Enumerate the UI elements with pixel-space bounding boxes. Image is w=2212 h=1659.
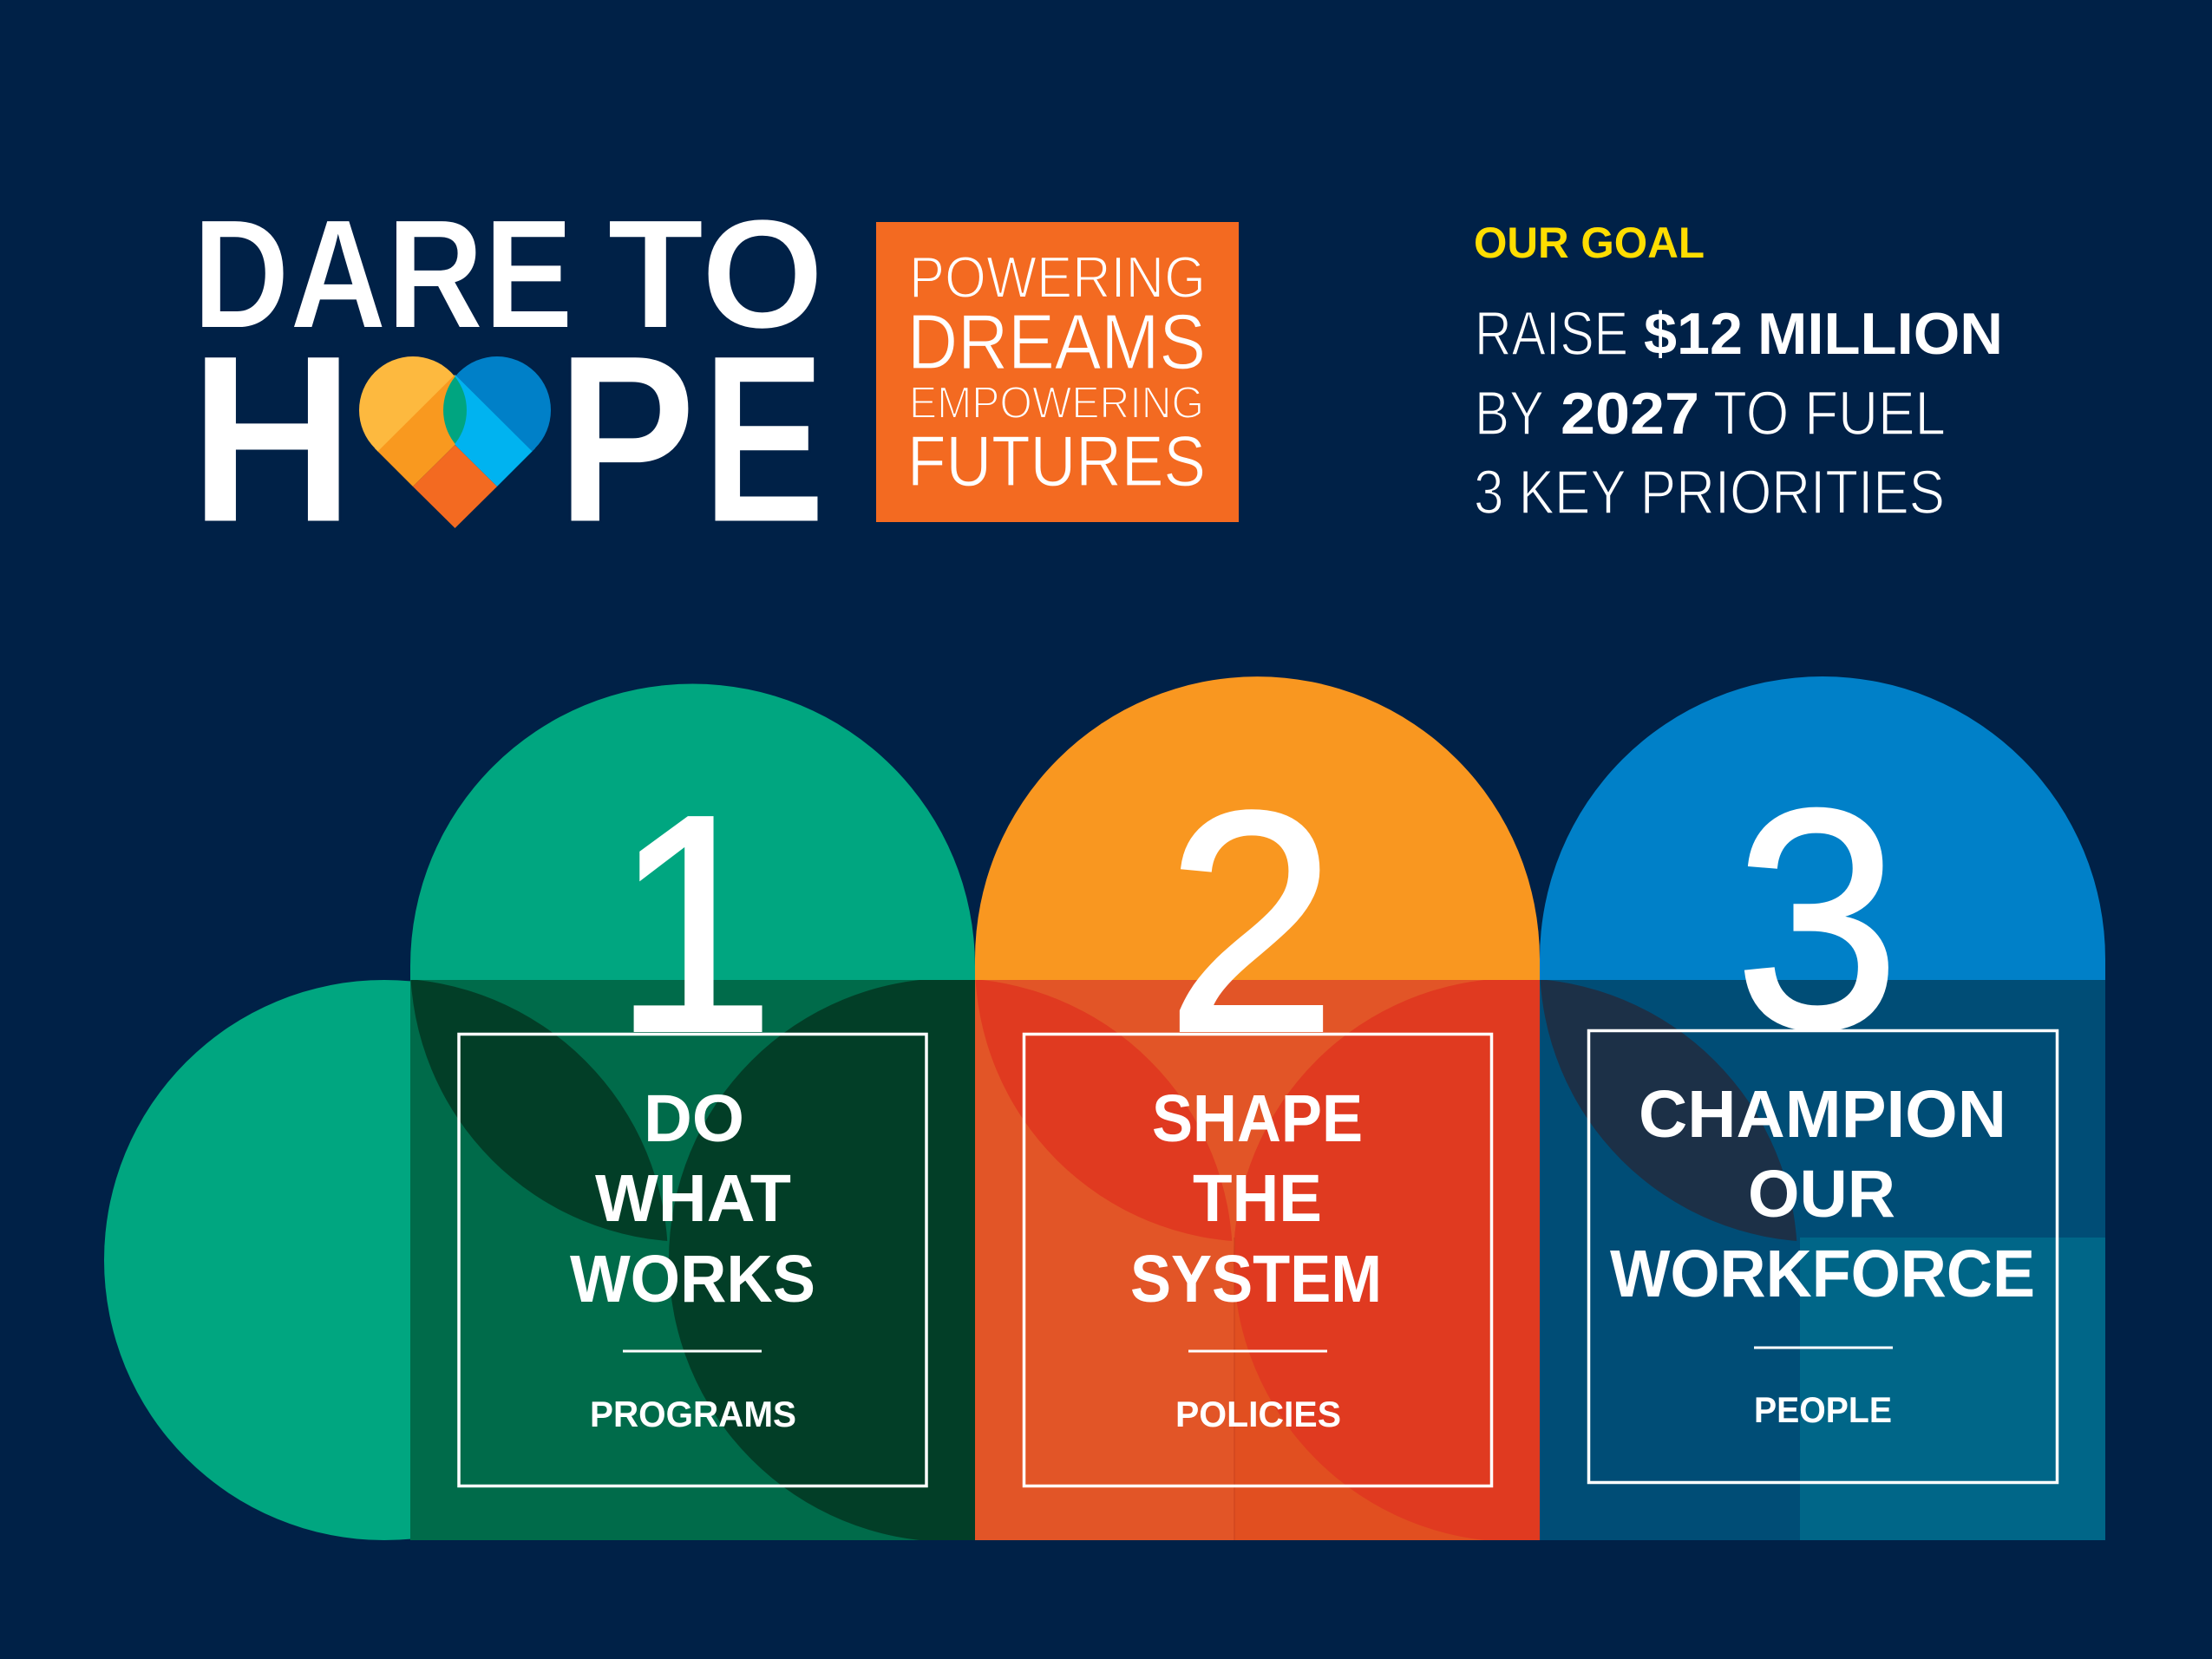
panel background: orange red bbox=[975, 980, 1540, 1540]
panel background: dark green bbox=[410, 980, 975, 1540]
shape: left dark lens bbox=[411, 980, 668, 1241]
goal line 1 bbox=[1475, 300, 2003, 369]
logo text: TO: TO bbox=[607, 187, 824, 362]
goal line 1: $12 bbox=[1644, 301, 1743, 367]
title: CHAMPION OUR WORKFORCE: WORKFORCE bbox=[1610, 1237, 2035, 1311]
goal line 1: RAISE bbox=[1475, 300, 1628, 369]
title: SHAPE THE SYSTEM: SYSTEM bbox=[1130, 1242, 1382, 1316]
box outline bbox=[1589, 1030, 2058, 1483]
thin seam line bbox=[1234, 1238, 1235, 1540]
shape: blue arch bbox=[1540, 676, 2105, 980]
goal line 2: BY bbox=[1475, 380, 1544, 448]
label: PEOPLE: PEOPLE bbox=[1754, 1389, 1892, 1430]
icon: heart standing in for the O bbox=[359, 356, 551, 528]
goal line 1: MILLION bbox=[1757, 301, 2003, 367]
title: SHAPE THE SYSTEM: SHAPE bbox=[1152, 1081, 1363, 1156]
number 3: 3 bbox=[1735, 745, 1900, 1094]
shape: left dark lens bbox=[1541, 980, 1797, 1241]
logo text: DARE: DARE bbox=[193, 187, 573, 362]
shape: right dark half circle bbox=[669, 980, 975, 1540]
box outline bbox=[1024, 1034, 1492, 1486]
title: DO WHAT WORKS: WORKS bbox=[570, 1242, 815, 1316]
shape: right red half circle bbox=[1234, 980, 1540, 1540]
title: CHAMPION OUR WORKFORCE: OUR bbox=[1748, 1157, 1895, 1231]
panel background: dark blue bbox=[1540, 980, 2105, 1540]
logo letter: H: H bbox=[188, 304, 356, 573]
title: DO WHAT WORKS bbox=[570, 1081, 815, 1316]
lower right tint bbox=[1234, 1238, 1540, 1540]
panel 3: champion our workforce bbox=[1540, 676, 2105, 1540]
goal line 3: 3 KEY PRIORITIES bbox=[1474, 459, 1945, 527]
title: CHAMPION OUR WORKFORCE bbox=[1610, 1077, 2035, 1311]
title: SHAPE THE SYSTEM bbox=[1130, 1081, 1382, 1316]
title: SHAPE THE SYSTEM: THE bbox=[1193, 1161, 1322, 1236]
text: DREAMS: DREAMS bbox=[907, 299, 1206, 386]
shape: orange arch bbox=[975, 676, 1540, 980]
divider bbox=[1188, 1349, 1327, 1353]
shape: left green circle bbox=[104, 980, 410, 1540]
shape: left red lens bbox=[975, 980, 1232, 1241]
text: POWERING: POWERING bbox=[909, 245, 1206, 310]
number 2: 2 bbox=[1166, 746, 1337, 1097]
goal line 2: 2027 bbox=[1561, 381, 1699, 447]
shape: green arch bbox=[410, 683, 975, 980]
goal line 2 bbox=[1475, 380, 1946, 448]
text: EMPOWERING: EMPOWERING bbox=[909, 378, 1204, 428]
heading: OUR GOAL: OUR GOAL bbox=[1474, 219, 1705, 267]
logo letter: P: P bbox=[556, 304, 697, 573]
panel: orange tagline box bbox=[876, 222, 1239, 522]
logo letter: E: E bbox=[702, 304, 826, 573]
title: DO WHAT WORKS: DO bbox=[644, 1081, 744, 1156]
divider bbox=[1754, 1346, 1893, 1349]
text block: our goal bbox=[1474, 219, 2003, 527]
number 1: 1 bbox=[613, 752, 775, 1096]
title: CHAMPION OUR WORKFORCE: CHAMPION bbox=[1639, 1077, 2006, 1152]
label: PROGRAMS: PROGRAMS bbox=[590, 1394, 796, 1434]
logo: Dare to Hope bbox=[188, 187, 826, 573]
label: POLICIES: POLICIES bbox=[1175, 1394, 1341, 1434]
title: DO WHAT WORKS: WHAT bbox=[595, 1161, 791, 1236]
panel 1: do what works bbox=[104, 683, 975, 1540]
divider bbox=[623, 1349, 762, 1353]
lower right teal block bbox=[1800, 1238, 2105, 1540]
text: FUTURES: FUTURES bbox=[907, 421, 1206, 501]
goal line 2: TO FUEL bbox=[1713, 380, 1946, 448]
box outline bbox=[459, 1034, 926, 1486]
panel 2: shape the system bbox=[975, 676, 1540, 1540]
